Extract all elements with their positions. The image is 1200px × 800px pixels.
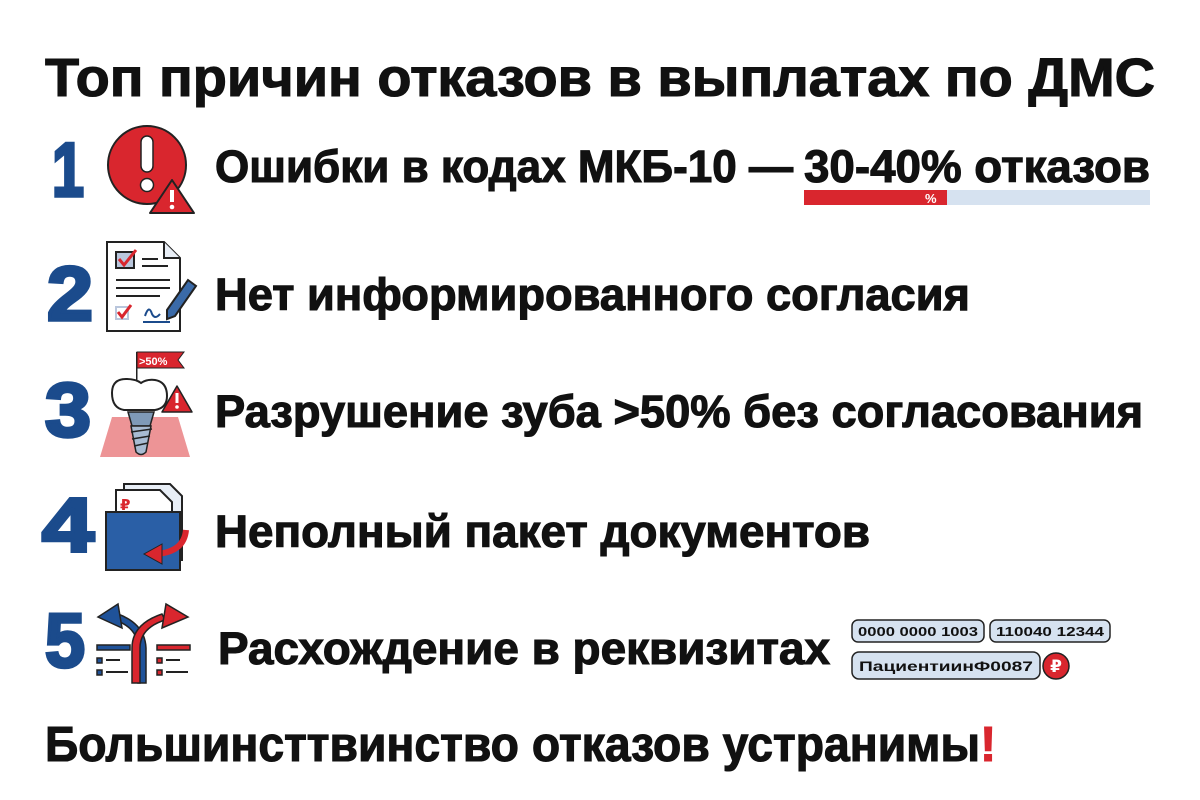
row 1 [52,126,1150,213]
number 4: 4 [42,483,94,568]
chips: requisites [852,620,1110,679]
title: Топ причин отказов в выплатах по ДМС [45,48,1155,108]
number 5: 5 [45,599,85,684]
icon: consent document [107,242,196,331]
chips: requisites: ПациентиинФ0087 [859,658,1033,674]
number 1: 1 [52,128,84,213]
row 3 [45,352,1143,457]
text: incomplete package: Неполный пакет документов [215,506,870,557]
text: 30-40%: 30-40% отказов [804,141,1150,192]
text: MKB errors: Ошибки в кодах МКБ-10 — [215,141,793,192]
row 4 [42,483,870,570]
number 2: 2 [47,252,93,337]
progress bar [804,190,1150,206]
text: details mismatch: Расхождение в реквизитах [218,623,830,674]
number 3: 3 [45,368,91,453]
footer: Большинсттвинство отказов устранимы [45,718,980,772]
icon: diverging arrows [97,604,190,683]
icon: folder with documents [106,484,186,570]
chips: requisites: 0000 0000 1003 [858,624,978,639]
icon: tooth implant [100,352,192,457]
chips: requisites: 110040 12344 [996,624,1105,639]
text: no consent: Нет информированного согласия [215,269,970,320]
row 5 [45,599,1110,684]
text: tooth destruction: Разрушение зуба >50% без согласования [215,386,1143,437]
icon: folder with documents: ₽ [120,497,130,514]
footer: ! [980,718,996,772]
icon: error circle [108,126,194,213]
progress bar: % [925,191,937,206]
chips: requisites: ₽ [1050,657,1062,676]
icon: tooth implant: >50% [139,356,168,368]
row 2 [47,242,970,337]
